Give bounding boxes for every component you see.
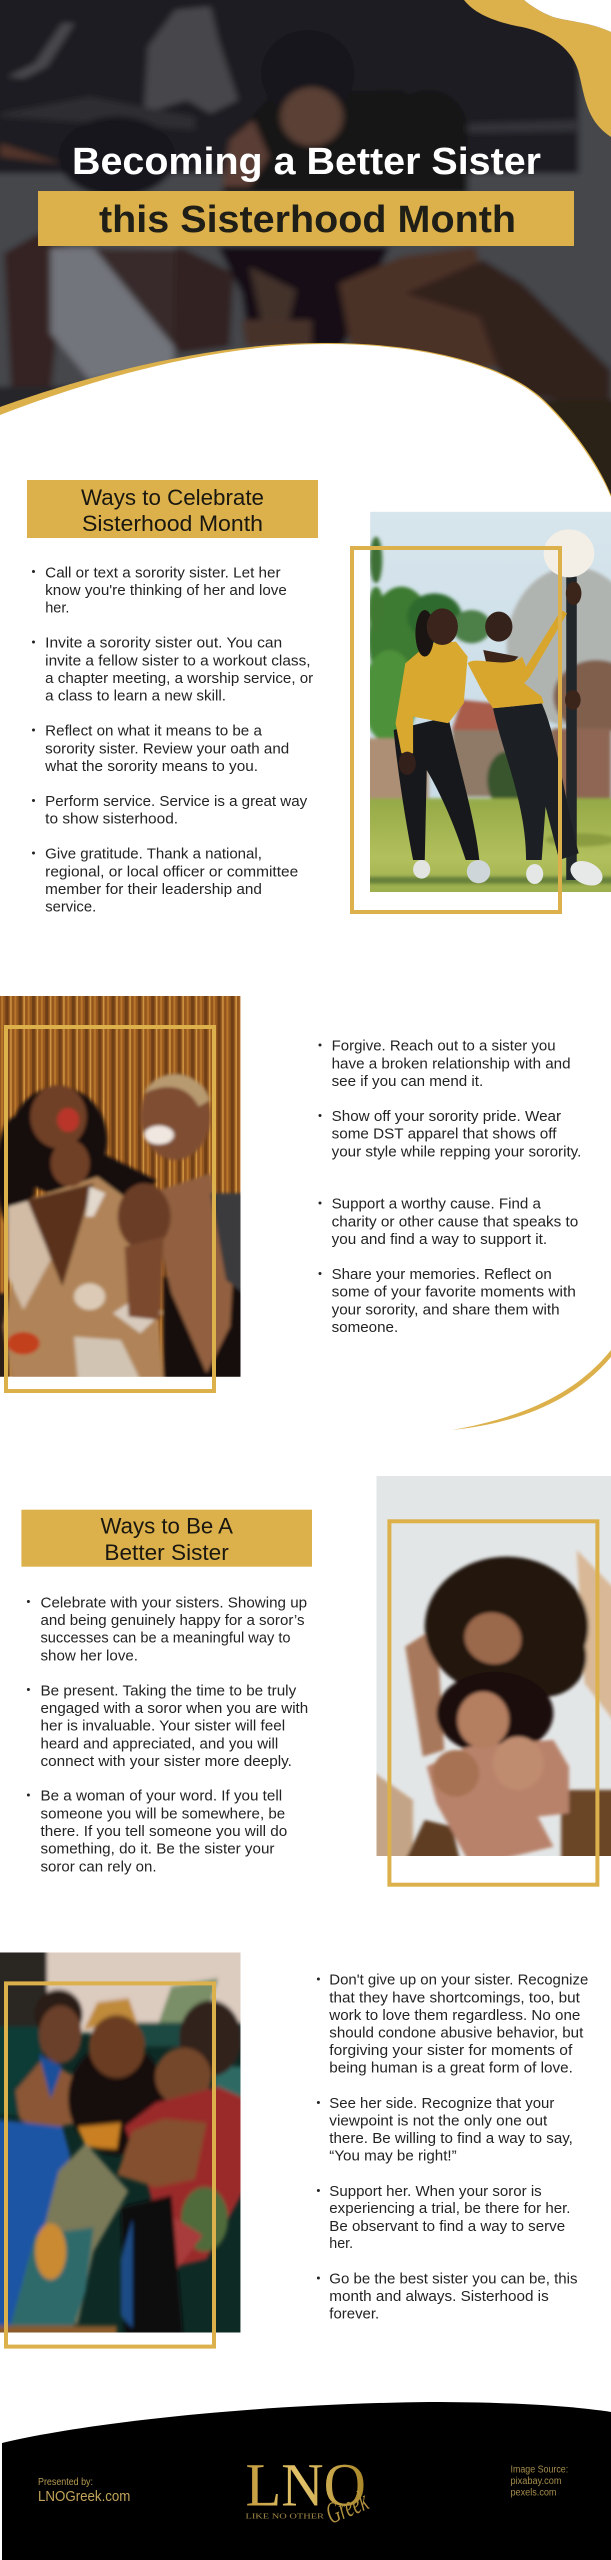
title: first line: Becoming a Better Sister: [72, 141, 541, 183]
bullet list: ways to be a better sister, part two: Be observant to find a way to serve: [329, 2218, 565, 2235]
photo: two women in yellow sweaters by a lamp post: [362, 512, 611, 898]
footer: LNO Greek logo: LNO: [246, 2453, 366, 2520]
bullet list: ways to be a better sister, part two: Support her. When your soror is: [329, 2183, 542, 2200]
footer: presented by: LNOGreek.com: [38, 2489, 130, 2505]
bullet list: ways to celebrate, part one: a class to learn a new skill.: [45, 688, 226, 705]
bullet list: ways to celebrate, part one: know you're thinking of her and love: [45, 582, 287, 599]
bullet list: ways to celebrate, part one: [32, 564, 313, 916]
footer: LNO Greek logo: Greek: [321, 2484, 373, 2530]
bullet list: ways to celebrate, part one: service.: [45, 899, 96, 916]
heading: Ways to Celebrate Sisterhood Month: Ways to Celebrate: [81, 485, 264, 510]
heading: Ways to Celebrate Sisterhood Month: [27, 480, 318, 538]
heading: Ways to Be A Better Sister: [21, 1510, 312, 1567]
bullet list: ways to be a better sister, part one: soror can rely on.: [40, 1858, 156, 1875]
bullet list: ways to be a better sister, part two: forgiving your sister for moments of: [329, 2042, 573, 2059]
bullet list: ways to be a better sister, part two: being human is a great form of love.: [329, 2060, 573, 2077]
heading: Ways to Celebrate Sisterhood Month: Sisterhood Month: [82, 511, 263, 536]
bullet list: ways to be a better sister, part one: Be a woman of your word. If you tell: [40, 1788, 282, 1805]
bullet list: ways to celebrate, part two: Show off your sorority pride. Wear: [332, 1108, 561, 1125]
heading: Ways to Be A Better Sister: Ways to Be A: [100, 1513, 233, 1538]
footer: LNO Greek logo: LIKE NO OTHER: [246, 2513, 324, 2521]
photo: three women in colourful prints on a sofa: [0, 1946, 246, 2338]
bullet list: ways to celebrate, part one: Reflect on what it means to be a: [45, 723, 263, 740]
bullet list: ways to celebrate, part one: Invite a sorority sister out. You can: [45, 635, 282, 652]
footer: presented by: [38, 2477, 130, 2505]
footer: image sources: pixabay.com: [510, 2476, 562, 2487]
bullet list: ways to be a better sister, part one: and being genuinely happy for a soror’s: [40, 1612, 305, 1629]
bullet list: ways to be a better sister, part one: heard and appreciated, and you will: [40, 1735, 278, 1752]
bullet list: ways to be a better sister, part one: Be present. Taking the time to be truly: [40, 1682, 297, 1699]
gold swoosh: [452, 1350, 611, 1430]
bullet list: ways to celebrate, part two: charity or other cause that speaks to: [332, 1213, 578, 1230]
bullet list: ways to be a better sister, part two: that they have shortcomings, too, but: [329, 1989, 581, 2006]
gold frame: photo two: [6, 1027, 214, 1391]
footer: image sources: [510, 2464, 568, 2499]
bullet list: ways to celebrate, part one: invite a fellow sister to a workout class,: [45, 652, 311, 669]
bullet list: ways to celebrate, part two: your style while repping your sorority.: [332, 1143, 581, 1160]
bullet list: ways to be a better sister, part two: month and always. Sisterhood is: [329, 2288, 549, 2305]
bullet list: ways to be a better sister, part two: viewpoint is not the only one out: [329, 2113, 548, 2130]
gold frame: photo one: [352, 548, 560, 912]
bullet list: ways to celebrate, part one: Call or text a sorority sister. Let her: [45, 564, 281, 581]
bullet list: ways to be a better sister, part one: there. If you tell someone you will do: [40, 1823, 287, 1840]
bullet list: ways to be a better sister, part one: engaged with a soror when you are with: [40, 1700, 308, 1717]
footer: black curved band: [2, 2402, 611, 2560]
bullet list: ways to be a better sister, part one: show her love.: [40, 1647, 138, 1664]
bullet list: ways to be a better sister, part one: [27, 1594, 308, 1875]
bullet list: ways to celebrate, part two: you and find a way to support it.: [332, 1231, 547, 1248]
bullet list: ways to celebrate, part two: someone.: [332, 1319, 398, 1336]
heading: Ways to Be A Better Sister: Better Sister: [104, 1540, 229, 1565]
photo: two women laughing in front of gold tinsel: [0, 996, 246, 1380]
bullet list: ways to be a better sister, part one: successes can be a meaningful way to: [40, 1630, 290, 1647]
gold frame: photo four: [6, 1983, 214, 2347]
gold frame: photo three: [389, 1521, 597, 1885]
bullet list: ways to celebrate, part two: [318, 1038, 581, 1336]
bullet list: ways to celebrate, part one: sorority sister. Review your oath and: [45, 740, 289, 757]
footer: presented by: Presented by:: [38, 2477, 93, 2488]
bullet list: ways to be a better sister, part two: Don't give up on your sister. Recognize: [329, 1972, 588, 1989]
bullet list: ways to celebrate, part one: her.: [45, 600, 69, 617]
title banner: [38, 191, 574, 246]
bullet list: ways to celebrate, part two: some of your favorite moments with: [332, 1284, 576, 1301]
decorative gold blob: top right corner: [464, 0, 611, 137]
bullet list: ways to celebrate, part one: Give gratitude. Thank a national,: [45, 846, 262, 863]
bullet list: ways to be a better sister, part two: there. Be willing to find a way to say,: [329, 2130, 573, 2147]
bullet list: ways to celebrate, part one: to show sisterhood.: [45, 811, 178, 828]
bullet list: ways to celebrate, part one: what the sorority means to you.: [44, 758, 258, 775]
bullet list: ways to be a better sister, part two: “You may be right!”: [329, 2148, 457, 2165]
bullet list: ways to be a better sister, part two: See her side. Recognize that your: [329, 2095, 554, 2112]
bullet list: ways to be a better sister, part two: Go be the best sister you can be, this: [329, 2271, 578, 2288]
bullet list: ways to celebrate, part two: Share your memories. Reflect on: [332, 1266, 552, 1283]
hero photo: women gathered around a laptop, darkened: [0, 0, 611, 533]
bullet list: ways to be a better sister, part one: Celebrate with your sisters. Showing up: [40, 1594, 307, 1611]
bullet list: ways to celebrate, part two: see if you can mend it.: [332, 1073, 483, 1090]
title banner: this Sisterhood Month: [99, 199, 516, 241]
bullet list: ways to be a better sister, part two: her.: [329, 2235, 353, 2252]
bullet list: ways to celebrate, part one: a chapter meeting, a worship service, or: [45, 670, 313, 687]
photo: two women embracing, curly hair: [370, 1476, 611, 1860]
bullet list: ways to celebrate, part one: regional, or local officer or committee: [45, 863, 298, 880]
bullet list: ways to be a better sister, part one: someone you will be somewhere, be: [40, 1805, 285, 1822]
bullet list: ways to celebrate, part two: some DST apparel that shows off: [332, 1126, 557, 1143]
bullet list: ways to celebrate, part two: your sorority, and share them with: [332, 1301, 560, 1318]
bullet list: ways to celebrate, part one: Perform service. Service is a great way: [45, 793, 308, 810]
bullet list: ways to be a better sister, part one: her is invaluable. Your sister will feel: [40, 1718, 285, 1735]
bullet list: ways to celebrate, part one: member for their leadership and: [45, 881, 262, 898]
bullet list: ways to celebrate, part two: Support a worthy cause. Find a: [332, 1196, 542, 1213]
bullet list: ways to be a better sister, part one: something, do it. Be the sister your: [40, 1841, 274, 1858]
footer: image sources: pexels.com: [510, 2488, 556, 2499]
footer: image sources: Image Source:: [510, 2464, 568, 2475]
bullet list: ways to be a better sister, part two: forever.: [329, 2306, 379, 2322]
bullet list: ways to be a better sister, part two: should condone abusive behavior, but: [329, 2025, 584, 2042]
bullet list: ways to be a better sister, part two: experiencing a trial, be there for her.: [329, 2200, 570, 2217]
bullet list: ways to be a better sister, part two: work to love them regardless. No one: [328, 2007, 580, 2024]
bullet list: ways to be a better sister, part one: connect with your sister more deeply.: [40, 1753, 292, 1770]
bullet list: ways to celebrate, part two: have a broken relationship with and: [332, 1055, 571, 1072]
bullet list: ways to celebrate, part two: Forgive. Reach out to a sister you: [332, 1038, 556, 1055]
bullet list: ways to be a better sister, part two: [317, 1972, 588, 2322]
